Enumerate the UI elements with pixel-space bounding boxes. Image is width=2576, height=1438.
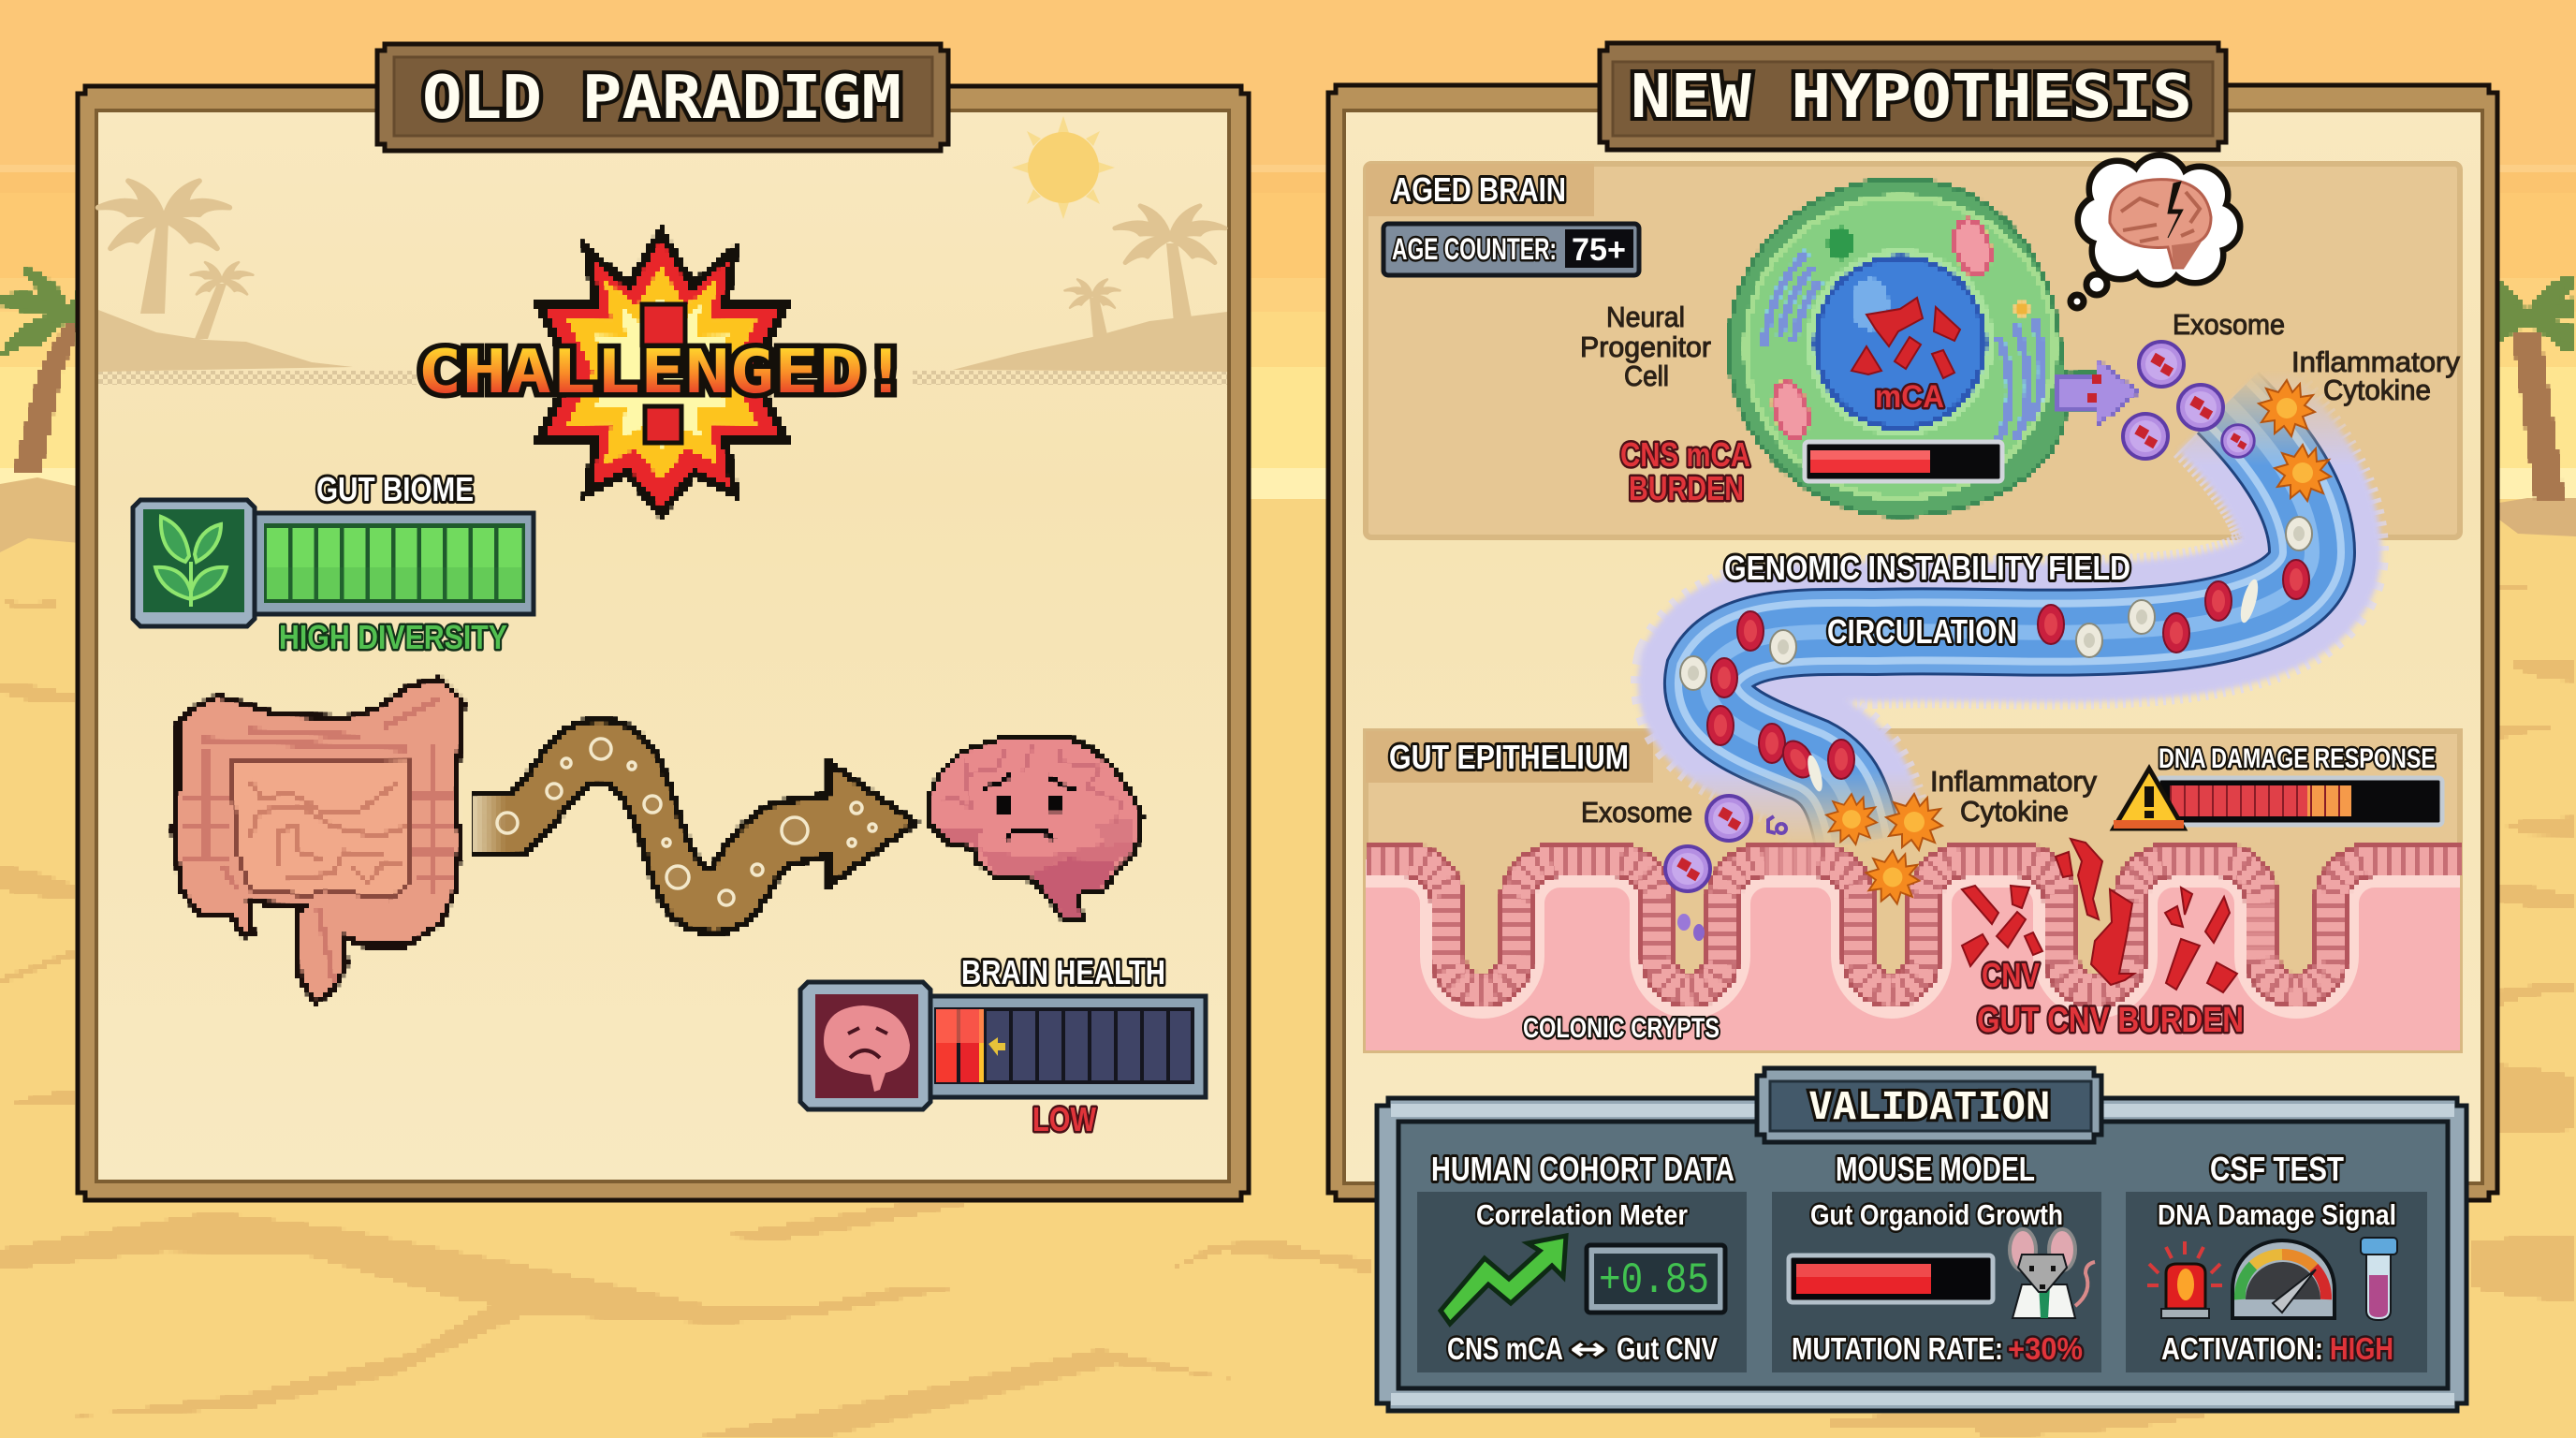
cnv fragments: [1962, 839, 2237, 992]
correlation caption: [1447, 1330, 1718, 1367]
gut biome label: GUT BIOME: [316, 470, 474, 508]
small intestine: [231, 758, 410, 899]
neural progenitor cell label: Cell: [1624, 360, 1669, 392]
right palm: [2430, 275, 2576, 499]
inflammatory cytokine label: brain: Inflammatory: [2291, 345, 2460, 378]
panel: new hypothesis: [1328, 43, 2497, 1200]
column: csf test: CSF TEST: [2210, 1150, 2344, 1188]
circulation label: CIRCULATION: [1827, 612, 2017, 651]
inflammatory cytokine label: gut: Cytokine: [1960, 795, 2069, 828]
region: gut epithelium: [1366, 731, 2460, 1050]
gut biome gauge: [133, 500, 534, 626]
cns mca burden label: CNS mCA: [1620, 435, 1750, 474]
cns burden bar: [1805, 442, 2002, 481]
interior: [1344, 110, 2482, 1183]
mutation rate caption: +30%: [2008, 1331, 2083, 1366]
inflammatory cytokine label: gut: [1930, 765, 2097, 828]
icon: alarm siren: [2147, 1241, 2222, 1318]
age counter: AGE COUNTER:: [1392, 232, 1557, 266]
challenged text: CHALLENGED!: [417, 338, 908, 407]
column: csf test: DNA Damage Signal: [2158, 1198, 2396, 1231]
circulation vessel with genomic instability field: [1707, 403, 2312, 843]
brain health label: BRAIN HEALTH: [961, 953, 1165, 991]
left island: [0, 477, 80, 552]
dna damage response gauge: [2114, 743, 2442, 829]
arrow: gut to brain: [462, 720, 915, 932]
icon: gut: [173, 679, 463, 1004]
panel: old paradigm: [78, 44, 1249, 1200]
column: human cohort data: Correlation Meter: [1476, 1198, 1688, 1231]
icon: leaf: [133, 500, 255, 626]
sand streaks: [0, 585, 2576, 1438]
title plate: old paradigm: OLD PARADIGM: [422, 64, 901, 133]
neural progenitor cell label: Neural: [1606, 301, 1685, 333]
title plate: new hypothesis: NEW HYPOTHESIS: [1631, 63, 2192, 132]
high diversity label: HIGH DIVERSITY: [279, 618, 507, 656]
correlation caption: Gut CNV: [1617, 1331, 1718, 1366]
face: [995, 794, 1062, 813]
title plate: validation: VALIDATION: [1808, 1085, 2050, 1128]
inflammatory cytokine label: brain: Cytokine: [2323, 374, 2431, 406]
correlation meter readout: [1587, 1245, 1725, 1313]
cytokines: brain: [2259, 380, 2331, 501]
exosome secretion arrow: [2056, 360, 2138, 426]
exosome label: gut: Exosome: [1581, 796, 1692, 829]
title plate: validation: [1757, 1068, 2101, 1142]
crack: [2168, 182, 2183, 238]
tissue glow: [1366, 859, 2460, 990]
icon: gauge: [2232, 1240, 2334, 1318]
icon: warning triangle: [2114, 769, 2184, 829]
cns mca burden label: [1620, 435, 1750, 507]
gut epithelium tab: [1366, 731, 1653, 783]
colonic crypt epithelium band: [1366, 859, 2460, 990]
cnv label: CNV: [1982, 956, 2040, 994]
aged brain tab: AGED BRAIN: [1392, 170, 1566, 209]
icon: csf test tube: [2361, 1238, 2397, 1320]
exclamation mark: [642, 304, 685, 443]
bar frame: [253, 513, 534, 614]
background silhouettes: [98, 181, 1227, 372]
column: mouse model: [1772, 1150, 2101, 1372]
column: mouse model: Gut Organoid Growth: [1810, 1198, 2063, 1231]
empty segments: [987, 1011, 1191, 1080]
dna damage response gauge: DNA DAMAGE RESPONSE: [2159, 743, 2436, 774]
red segments: [936, 1009, 984, 1082]
title plate: new hypothesis: [1600, 43, 2226, 150]
column: human cohort data: HUMAN COHORT DATA: [1431, 1150, 1734, 1188]
colon haustra: [181, 699, 456, 983]
green segments: [267, 528, 522, 599]
panel: validation: [1377, 1068, 2466, 1411]
frame: [1328, 85, 2497, 1200]
gut epithelium tab: GUT EPITHELIUM: [1389, 738, 1629, 776]
aged brain tab: [1366, 164, 1594, 216]
mca label: mCA: [1875, 379, 1944, 415]
frame: [78, 86, 1249, 1200]
activation caption: HIGH: [2330, 1331, 2393, 1366]
icon: brain in frame: [800, 982, 930, 1109]
activation caption: ACTIVATION:: [2161, 1331, 2323, 1366]
organelles: [1949, 215, 1996, 279]
column: mouse model: MOUSE MODEL: [1836, 1150, 2035, 1188]
explosion burst with exclamation: [538, 232, 786, 514]
column: human cohort data: [1417, 1150, 1747, 1372]
exosome label: brain: Exosome: [2173, 308, 2285, 341]
correlation meter readout: +0.85: [1599, 1256, 1709, 1305]
age counter: [1383, 224, 1639, 275]
thought bubble with cracked brain: [2071, 155, 2240, 308]
neural progenitor cell label: Progenitor: [1580, 330, 1711, 363]
horizon dither: [98, 371, 1227, 385]
genomic instability field label: GENOMIC INSTABILITY FIELD: [1724, 549, 2130, 587]
age counter: 75+: [1572, 232, 1626, 268]
correlation caption: ↔: [1570, 1330, 1606, 1367]
cream panel interior: [96, 110, 1229, 1181]
icon: rising green arrow: [1441, 1236, 1566, 1324]
cytokines: gut: [1826, 794, 1942, 904]
sun: [1012, 116, 1115, 219]
nucleus: [1807, 249, 1994, 436]
icon: mouse in lab coat: [2010, 1229, 2095, 1318]
correlation caption: CNS mCA: [1447, 1331, 1563, 1366]
neural progenitor cell label: [1580, 301, 1711, 392]
exosomes: gut: [1665, 796, 1786, 941]
blood cells: [1680, 517, 2312, 793]
low label: LOW: [1032, 1100, 1096, 1138]
inflammatory cytokine label: brain: [2291, 345, 2460, 406]
right island: [2499, 498, 2576, 536]
chromosome fragments: [1852, 298, 1960, 378]
brain health gauge: [800, 982, 1206, 1109]
icon: sad brain: [929, 737, 1142, 920]
steel frame: [1377, 1098, 2466, 1411]
inflammatory cytokine label: gut: Inflammatory: [1930, 765, 2097, 798]
neural progenitor cell: [1729, 179, 2097, 516]
organoid growth bar: [1789, 1255, 1993, 1302]
title plate: old paradigm: [377, 44, 948, 151]
mutation rate caption: MUTATION RATE:: [1792, 1331, 2003, 1366]
exosomes: brain: [2123, 342, 2254, 459]
bubbles: [497, 739, 876, 905]
gut cnv burden label: GUT CNV BURDEN: [1977, 1001, 2244, 1040]
column: csf test: [2126, 1150, 2427, 1372]
region: aged brain: [1366, 164, 2460, 537]
colonic crypts label: COLONIC CRYPTS: [1523, 1013, 1720, 1044]
cns mca burden label: BURDEN: [1629, 469, 1744, 507]
left palm: [0, 271, 149, 473]
